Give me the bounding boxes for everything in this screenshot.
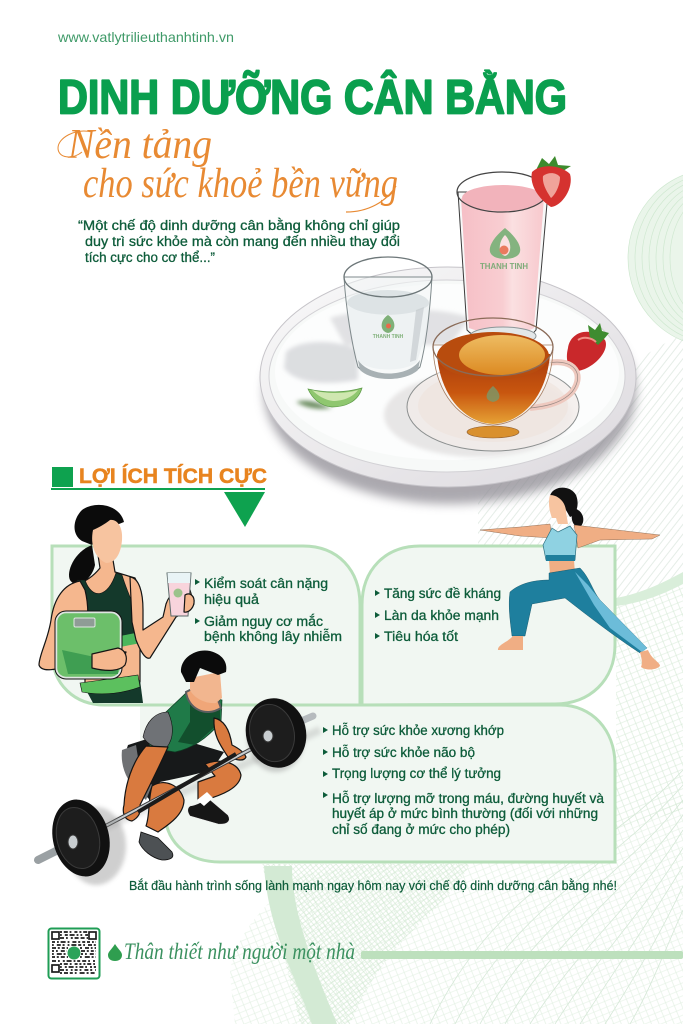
- tray shadow: [264, 280, 636, 504]
- bra top: [77, 573, 141, 638]
- closing line: Bắt đầu hành trình sống lành mạnh ngay hôm nay với chế độ dinh dưỡng cân bằng nhé!: [129, 878, 617, 893]
- heading: benefits: LỢI ÍCH TÍCH CỰC: [79, 465, 267, 488]
- list: panel 3 benefits: chỉ số đang ở mức cho phép): [332, 822, 510, 837]
- legs: [509, 568, 647, 653]
- title: DINH DƯỠNG CÂN BẰNG: [58, 70, 567, 124]
- aloe slice: [308, 388, 362, 407]
- sports bra: [543, 526, 577, 560]
- tea saucer: [407, 363, 579, 451]
- panel: top left: [52, 546, 360, 705]
- right sock: [197, 792, 213, 806]
- left leg: [146, 783, 184, 832]
- neck and torso: [77, 555, 141, 684]
- list: panel 3 benefits: Hỗ trợ sức khỏe xương khớp: [332, 723, 504, 738]
- feet: [498, 636, 660, 670]
- panel: top right: [362, 546, 615, 705]
- illustration: yoga woman: [480, 488, 660, 670]
- qr centre logo: [68, 946, 80, 960]
- list: panel 3 benefits: Hỗ trợ lượng mỡ trong máu, đường huyết và: [332, 791, 604, 806]
- barbell: [38, 716, 313, 860]
- barbell shadow: [55, 730, 320, 850]
- tea cup: [433, 318, 578, 438]
- plate shadows: [284, 309, 572, 457]
- right leg: [198, 761, 241, 800]
- pattern: diagonal hatch: [478, 335, 683, 600]
- list: panel 3 benefits: huyết áp ở mức bình thường (đối với những: [332, 806, 598, 821]
- right arm: [130, 577, 194, 658]
- pattern: green circle right: [628, 169, 683, 347]
- pattern: green wave: [616, 572, 683, 606]
- illustration: man lifting barbell: [38, 650, 320, 885]
- subtitle script: cho sức khoẻ bền vững: [83, 161, 398, 207]
- strawberry on tray: [567, 323, 609, 371]
- list: panel 2 benefits: Tăng sức đề kháng: [384, 586, 501, 601]
- subtitle script: Nền tảng: [67, 122, 212, 168]
- left arm: [39, 581, 126, 670]
- pattern: lower mesh: [230, 800, 683, 1024]
- weight plate left: [44, 793, 126, 885]
- ponytail: [572, 508, 583, 527]
- face: [549, 495, 568, 524]
- face: [92, 520, 122, 563]
- hand on glass: [184, 594, 194, 612]
- shorts: [125, 738, 224, 800]
- icon: green drop: [108, 944, 122, 961]
- illustration: tray with drinks: [260, 156, 636, 504]
- arrow: down triangle: [224, 492, 265, 527]
- smoothie glass: [457, 172, 548, 345]
- list: panel 1 benefits: bệnh không lây nhiễm: [204, 629, 342, 644]
- strawberry on glass: [531, 156, 571, 207]
- list: panel 2 benefits: Làn da khỏe mạnh: [384, 608, 499, 623]
- swash on capital N: [58, 131, 92, 157]
- hair: [74, 505, 124, 545]
- illustration: woman with scale and drink: [39, 505, 194, 703]
- neck collar: [186, 688, 221, 712]
- swash on final g: [346, 186, 396, 212]
- tagline: Thân thiết như người một nhà: [124, 939, 355, 964]
- logo on water glass: THANH TINH: [373, 334, 404, 340]
- shirt: [147, 692, 222, 752]
- hand on scale: [92, 648, 126, 670]
- left arm: [123, 746, 168, 821]
- background: line patterns: [230, 169, 683, 1024]
- quote text: tích cực cho cơ thể...”: [85, 250, 215, 265]
- right shoe: [188, 798, 229, 824]
- logo on smoothie glass: THANH TINH: [480, 261, 528, 271]
- glass with milk: [167, 573, 191, 616]
- ponytail: [69, 545, 95, 584]
- list: panel 1 benefits: Giảm nguy cơ mắc: [204, 614, 323, 629]
- panel: bottom: [140, 705, 615, 862]
- water glass: [344, 257, 432, 379]
- subtitle script: [58, 122, 398, 212]
- list: panel 2 benefits: Tiêu hóa tốt: [384, 629, 458, 644]
- midriff: [549, 560, 575, 574]
- left sock and shoe: [139, 825, 173, 860]
- list: panel 3 benefits: Hỗ trợ sức khỏe não bộ: [332, 745, 475, 760]
- footer bar: [361, 951, 683, 959]
- grey sleeve: [143, 712, 172, 748]
- list: panel 1 benefits: Kiểm soát cân nặng: [204, 576, 328, 591]
- quote text: [78, 218, 400, 265]
- list: panel 1 benefits: hiệu quả: [204, 592, 260, 607]
- head: [181, 650, 226, 703]
- pattern: mesh right: [616, 582, 683, 830]
- top band: [120, 632, 141, 647]
- arms: [480, 524, 660, 548]
- qr code: [48, 928, 100, 978]
- list: panel 1 benefits: [195, 576, 342, 644]
- weight plate right: [238, 692, 314, 774]
- pattern: green swoosh: [264, 866, 337, 1024]
- pants: [80, 675, 143, 703]
- qr finder squares: [52, 932, 96, 972]
- tray: [260, 267, 636, 487]
- logo on smoothie glass: [480, 228, 528, 271]
- list: panel 2 benefits: [375, 586, 501, 644]
- website url: www.vatlytrilieuthanhtinh.vn: [57, 29, 234, 45]
- hair: [550, 488, 578, 517]
- pattern: concentric arcs: [430, 770, 683, 1024]
- right arm: [214, 718, 246, 760]
- logo on tea cup: [487, 386, 499, 402]
- quote text: “Một chế độ dinh dưỡng cân bằng không chỉ giúp: [78, 218, 400, 233]
- scale: [55, 611, 122, 679]
- list: panel 3 benefits: [323, 723, 604, 837]
- list: panel 3 benefits: Trọng lượng cơ thể lý tưởng: [332, 766, 501, 781]
- panel border: bottom: [105, 705, 615, 862]
- heading: benefits: [51, 465, 267, 527]
- pattern: dense mesh: [262, 864, 470, 1024]
- quote text: duy trì sức khỏe mà còn mang đến nhiều thay đổi: [85, 234, 400, 249]
